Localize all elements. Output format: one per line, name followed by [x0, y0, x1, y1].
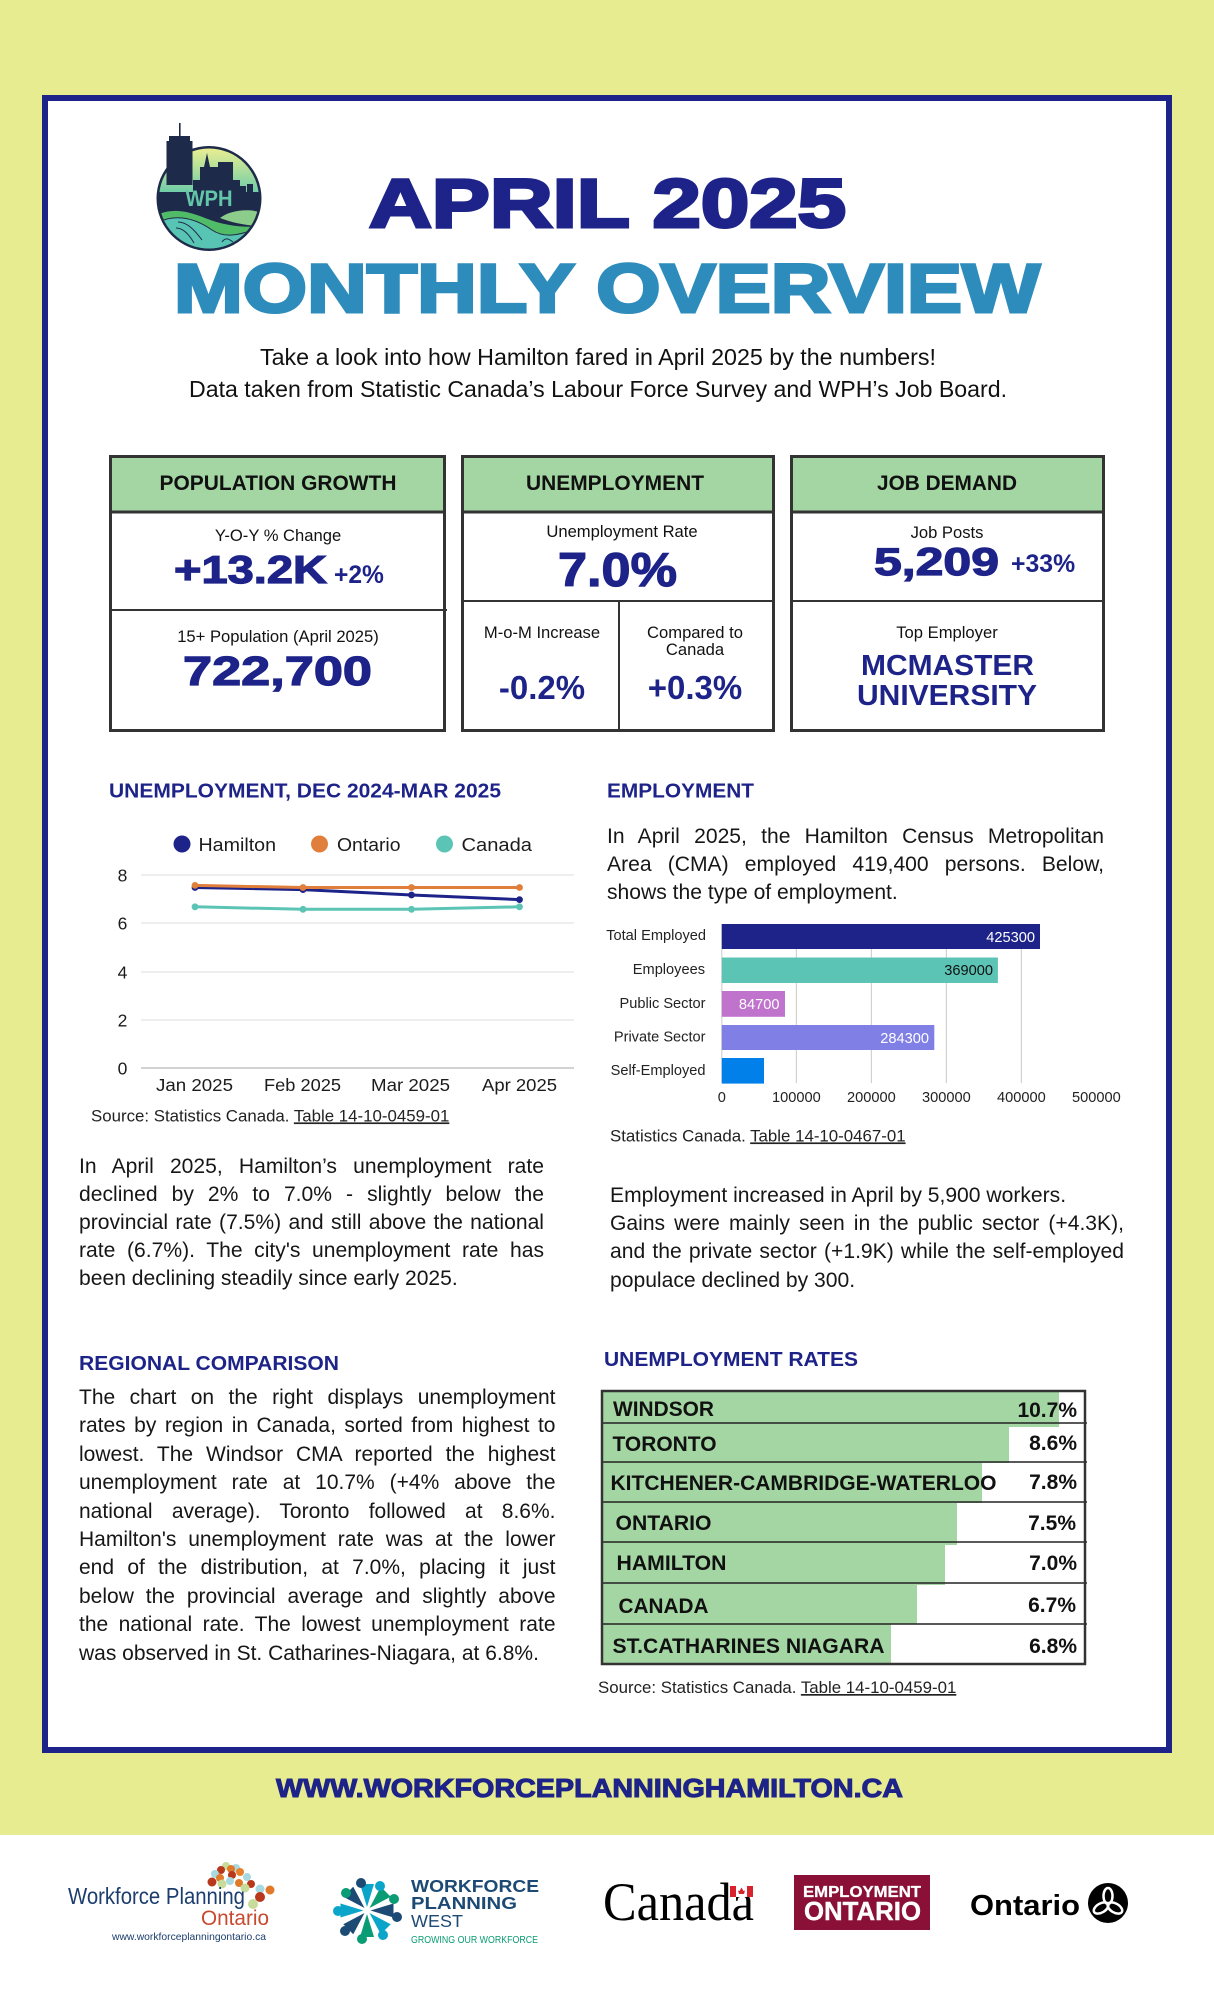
text: regional comparison: rates by region in Canada, sorted from highest to: [79, 1414, 556, 1437]
source note: Source: Statistics Canada. Table 14-10-0459-01: [91, 1106, 449, 1125]
chart: unemployment line chart: Mar 2025: [371, 1075, 450, 1095]
panel: unemployment: Canada: [666, 640, 725, 659]
heading: employment: EMPLOYMENT: [607, 780, 754, 802]
bar: Ontario: [602, 1503, 957, 1545]
chart: employment bar chart: 284300: [880, 1031, 929, 1047]
logo: Workforce Planning Ontario: [68, 1862, 274, 1943]
bar: Canada: [602, 1585, 917, 1624]
chart: unemployment line chart: 6: [118, 914, 127, 934]
text: employment intro: [607, 824, 1104, 904]
bar: Toronto: [602, 1427, 1009, 1463]
text: regional comparison: The chart on the right displays unemployment: [79, 1386, 556, 1409]
icon: WPH logo: [155, 123, 265, 255]
panel: job demand: JOB DEMAND: [877, 472, 1017, 495]
panel: job demand: [790, 456, 1105, 730]
title: April 2025: APRIL 2025: [369, 165, 846, 242]
chart: unemployment rates table: CANADA: [618, 1594, 708, 1618]
logo: Workforce Planning Ontario: www.workforceplanningontario.ca: [111, 1931, 266, 1943]
chart: unemployment rates table: [601, 1391, 1087, 1664]
panel: job demand: MCMASTER: [861, 650, 1034, 682]
panel: unemployment: 7.0%: [558, 543, 677, 596]
text: regional comparison: unemployment rate at 10.7% (+4% above the: [79, 1471, 556, 1494]
intro text: [189, 344, 1007, 402]
logo: Employment Ontario: EMPLOYMENT: [803, 1884, 921, 1901]
logo: Workforce Planning West: WORKFORCE: [411, 1876, 539, 1896]
logo: Workforce Planning West: WEST: [411, 1911, 463, 1931]
logo: Employment Ontario: [794, 1875, 930, 1930]
series: Canada: [192, 903, 523, 913]
text: regional comparison: [79, 1386, 556, 1665]
panel: population growth: +2%: [334, 562, 384, 589]
chart: unemployment rates table: 7.0%: [1029, 1552, 1077, 1575]
chart: employment bar chart: Employees: [633, 962, 705, 978]
intro text: Data taken from Statistic Canada’s Labour Force Survey and WPH’s Job Board.: [189, 376, 1007, 402]
panel: population growth: 15+ Population (April 2025): [177, 627, 379, 646]
chart: unemployment rates table: 8.6%: [1029, 1432, 1077, 1455]
logo: Workforce Planning Ontario: Ontario: [201, 1907, 269, 1930]
chart: unemployment line chart: 0: [118, 1058, 128, 1078]
logo: Workforce Planning Ontario: Workforce Planning: [68, 1883, 245, 1909]
chart: unemployment rates table: 7.5%: [1028, 1512, 1076, 1535]
chart: employment bar chart: Private Sector: [614, 1030, 706, 1046]
panel: unemployment: UNEMPLOYMENT: [526, 472, 704, 495]
logo: Ontario: Ontario: [970, 1890, 1080, 1922]
chart: employment bar chart: 84700: [739, 997, 780, 1013]
logo: Workforce Planning West: [333, 1876, 539, 1946]
source note: Statistics Canada. Table 14-10-0467-01: [610, 1126, 906, 1145]
text: employment summary: Employment increased in April by 5,900 workers.: [610, 1184, 1066, 1206]
chart: unemployment rates table: HAMILTON: [616, 1551, 726, 1575]
panel: population growth: POPULATION GROWTH: [160, 472, 396, 495]
logo: Workforce Planning West: PLANNING: [411, 1893, 517, 1913]
bar: Windsor: [602, 1391, 1059, 1427]
bar: St. Catharines Niagara: [602, 1624, 891, 1664]
intro text: Take a look into how Hamilton fared in April 2025 by the numbers!: [260, 344, 936, 370]
legend: [174, 835, 533, 855]
panel: job demand: UNIVERSITY: [857, 680, 1037, 712]
panel: population growth: Y-O-Y % Change: [215, 526, 341, 545]
frame border panel: [45, 98, 1169, 1750]
text: regional comparison: was observed in St. Catharines-Niagara, at 6.8%.: [79, 1642, 539, 1665]
chart: employment bar chart: 200000: [847, 1090, 896, 1106]
chart: unemployment rates table: 6.7%: [1028, 1594, 1076, 1617]
chart: unemployment line chart: [118, 835, 574, 1095]
text: regional comparison: lowest. The Windsor CMA reported the highest: [79, 1443, 556, 1466]
panel: job demand: Top Employer: [896, 623, 998, 642]
panel: unemployment: Unemployment Rate: [546, 522, 698, 541]
heading: unemployment rates: UNEMPLOYMENT RATES: [604, 1348, 858, 1371]
chart: employment bar chart: 0: [718, 1090, 726, 1106]
panel: job demand: Job Posts: [911, 523, 983, 542]
text: regional comparison: Hamilton's unemployment rate was at the lower: [79, 1528, 556, 1551]
text: employment intro: shows the type of employment.: [607, 881, 898, 904]
chart: unemployment line chart: Feb 2025: [264, 1075, 341, 1095]
chart: unemployment line chart: Jan 2025: [156, 1075, 233, 1095]
chart: unemployment rates table: WINDSOR: [613, 1397, 714, 1421]
chart: unemployment line chart: Apr 2025: [482, 1075, 557, 1095]
series: Ontario: [192, 882, 523, 891]
logo: Ontario: [970, 1883, 1128, 1923]
series: Hamilton: [192, 884, 523, 903]
text: regional comparison: the national rate. The lowest unemployment rate: [79, 1613, 556, 1636]
icon: WPH logo: WPH: [186, 186, 232, 211]
chart: unemployment rates table: ONTARIO: [616, 1511, 712, 1535]
chart: unemployment line chart: 8: [118, 866, 127, 886]
text: employment intro: In April 2025, the Hamilton Census Metropolitan: [607, 824, 1104, 848]
text: employment summary: Gains were mainly seen in the public sector (+4.3K), and the private sector (+1.9K) while the self-employed populace declined by 300.: [610, 1212, 1124, 1292]
text: regional comparison: end of the distribution, at 7.0%, placing it just: [79, 1556, 556, 1579]
source note: Source: Statistics Canada. Table 14-10-0459-01: [598, 1678, 956, 1697]
heading: regional comparison: REGIONAL COMPARISON: [79, 1352, 339, 1375]
legend: Hamilton: [198, 835, 276, 855]
panel: unemployment: Compared to: [647, 623, 743, 642]
chart: unemployment line chart: 4: [118, 962, 128, 982]
chart: employment bar chart: 500000: [1072, 1090, 1121, 1106]
chart: employment bar chart: 300000: [922, 1090, 971, 1106]
text: regional comparison: below the provincial average and slightly above: [79, 1585, 556, 1608]
panel: job demand: 5,209: [874, 541, 999, 584]
bar: Kitchener-Cambridge-Waterloo: [602, 1463, 982, 1503]
chart: unemployment line chart: 2: [118, 1010, 127, 1030]
website url: WWW.WORKFORCEPLANNINGHAMILTON.CA: [276, 1775, 903, 1803]
panel: unemployment: M-o-M Increase: [484, 623, 600, 642]
text: employment intro: Area (CMA) employed 419,400 persons. Below,: [607, 853, 1104, 876]
chart: unemployment rates table: ST.CATHARINES NIAGARA: [612, 1634, 884, 1658]
panel: unemployment: -0.2%: [499, 669, 585, 706]
logo: Canada wordmark: Canada: [603, 1872, 754, 1932]
legend: Ontario: [337, 835, 400, 855]
title: Monthly Overview: MONTHLY OVERVIEW: [174, 250, 1041, 327]
chart: employment bar chart: [606, 924, 1121, 1106]
chart: employment bar chart: Total Employed: [606, 928, 706, 944]
chart: unemployment rates table: 6.8%: [1029, 1635, 1077, 1658]
chart: employment bar chart: Public Sector: [620, 996, 706, 1012]
panel: population growth: [109, 456, 447, 730]
chart: employment bar chart: Self-Employed: [611, 1063, 706, 1079]
logo: Workforce Planning West: GROWING OUR WORKFORCE: [411, 1935, 538, 1946]
panel: population growth: 722,700: [183, 648, 372, 694]
chart: unemployment rates table: TORONTO: [612, 1432, 716, 1456]
logo: Employment Ontario: ONTARIO: [804, 1896, 921, 1926]
text: regional comparison: national average). Toronto followed at 8.6%.: [79, 1500, 556, 1523]
chart: employment bar chart: 425300: [986, 930, 1035, 946]
chart: unemployment rates table: 7.8%: [1029, 1471, 1077, 1494]
panel: population growth: +13.2K: [174, 549, 327, 592]
text: unemployment summary: In April 2025, Hamilton’s unemployment rate declined by 2% to 7.0% - slightly below the provincial rate (7.5%) and still above the national rate (6.7%). The city's unemployment rate has been declining steadily since early 2025.: [79, 1155, 544, 1290]
chart: employment bar chart: 400000: [997, 1090, 1046, 1106]
chart: unemployment rates table: KITCHENER-CAMBRIDGE-WATERLOO: [610, 1471, 996, 1495]
chart: unemployment rates table: 10.7%: [1017, 1399, 1077, 1422]
chart: employment bar chart: 100000: [772, 1090, 821, 1106]
chart: employment bar chart: 369000: [944, 963, 993, 979]
legend: Canada: [462, 835, 533, 855]
panel: job demand: +33%: [1011, 551, 1075, 578]
heading: unemployment chart: UNEMPLOYMENT, DEC 2024-MAR 2025: [109, 780, 501, 802]
panel: unemployment: +0.3%: [648, 669, 742, 706]
bar: Hamilton: [602, 1545, 945, 1585]
panel: unemployment: [461, 456, 775, 732]
